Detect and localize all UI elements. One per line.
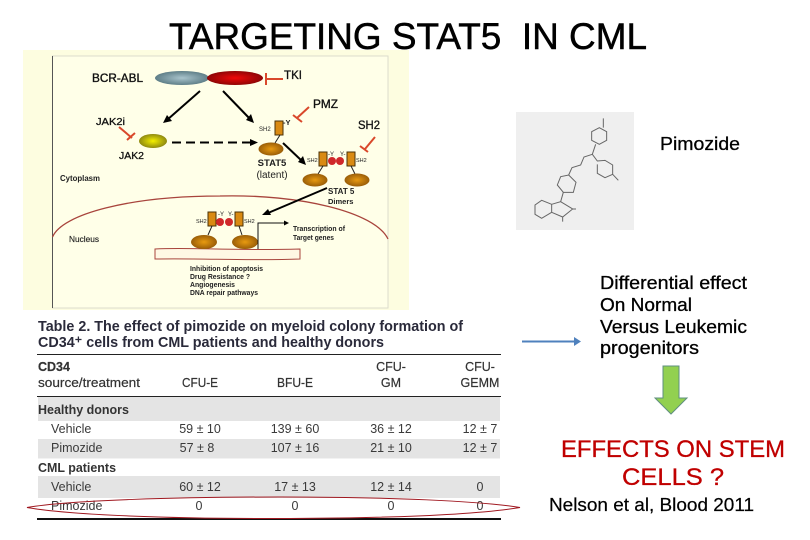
table body: 36 ± 12 xyxy=(370,422,412,436)
SH2 inhibitor: SH2 xyxy=(358,118,380,132)
latent STAT5: (latent) xyxy=(256,170,288,181)
table body: 139 ± 60 xyxy=(271,422,319,436)
table body: 12 ± 7 xyxy=(463,441,497,455)
table body: 0 xyxy=(292,499,299,513)
arrow: green down xyxy=(655,366,687,414)
downstream effects list: Angiogenesis xyxy=(190,280,235,289)
table header: GM xyxy=(381,376,401,390)
table rows shading xyxy=(38,397,500,498)
STAT5 dimer on DNA: SH2 xyxy=(196,219,207,225)
table body: Healthy donors xyxy=(38,403,129,417)
table body: CML patients xyxy=(38,461,116,475)
PMZ inhibitor xyxy=(293,97,338,122)
nucleus label: Nucleus xyxy=(69,235,99,244)
JAK2 xyxy=(119,134,167,162)
table body: 12 ± 14 xyxy=(370,480,412,494)
JAK2 inhibitor xyxy=(96,116,135,140)
table body: 0 xyxy=(196,499,203,513)
STAT5 dimer on DNA: -Y xyxy=(218,212,224,218)
table body: 17 ± 13 xyxy=(274,480,316,494)
table body: 0 xyxy=(388,499,395,513)
STAT5 dimer in cytoplasm: SH2 xyxy=(307,158,318,164)
STAT5 dimer on DNA: Y- xyxy=(228,212,233,218)
STAT5 dimer in cytoplasm xyxy=(302,152,370,186)
latent STAT5: STAT5 xyxy=(258,158,287,169)
table header: CFU-E xyxy=(182,376,218,390)
table title: Table 2. The effect of pimozide on myeloid colony formation of xyxy=(38,318,464,335)
nuclear membrane xyxy=(52,196,388,239)
table body: 107 ± 16 xyxy=(271,441,319,455)
title: TARGETING STAT5 IN CML xyxy=(169,16,647,57)
downstream effects list: DNA repair pathways xyxy=(190,288,258,297)
citation: Nelson et al, Blood 2011 xyxy=(549,495,754,515)
table header: GEMM xyxy=(461,376,499,390)
table header: CD34 xyxy=(38,360,70,374)
arrow to dimers xyxy=(283,143,306,165)
table header: CFU- xyxy=(376,360,406,374)
arrow: table to text xyxy=(522,337,581,346)
table body: 60 ± 12 xyxy=(179,480,221,494)
table body: Vehicle xyxy=(51,480,91,494)
latent STAT5 xyxy=(256,118,290,181)
table body: 0 xyxy=(477,499,484,513)
table body: 12 ± 7 xyxy=(463,422,497,436)
table body: Pimozide xyxy=(51,441,102,455)
table title: CD34⁺ cells from CML patients and healthy donors xyxy=(38,334,384,351)
table body: 59 ± 10 xyxy=(179,422,221,436)
STAT5 dimer in cytoplasm: SH2 xyxy=(356,158,367,164)
downstream effects list: Drug Resistance ? xyxy=(190,272,250,281)
downstream effects list: Inhibition of apoptosis xyxy=(190,264,263,273)
molecule xyxy=(535,118,618,222)
STAT5 dimer in cytoplasm: Y- xyxy=(340,152,345,158)
STAT 5 dimers label: STAT 5 xyxy=(328,187,355,196)
text: differential effect: On Normal xyxy=(600,294,692,315)
cytoplasm label: Cytoplasm xyxy=(60,174,100,183)
TKI inhibitor xyxy=(266,70,302,85)
table body: 57 ± 8 xyxy=(180,441,214,455)
callout: effects on stem cells: EFFECTS ON STEM xyxy=(561,436,785,463)
arrow dimers into nucleus xyxy=(262,188,327,215)
panel: table of pimozide effects xyxy=(27,318,520,519)
panel: STAT5 signalling pathway diagram: Dimers xyxy=(328,197,353,206)
DNA strand xyxy=(155,248,300,260)
table header: CFU- xyxy=(465,360,495,374)
text: differential effect: Differential effect xyxy=(600,272,747,293)
TKI inhibitor: TKI xyxy=(284,70,302,82)
STAT5 dimer on DNA: SH2 xyxy=(244,219,255,225)
transcription label: Transcription of xyxy=(293,224,345,233)
table header: source/treatment xyxy=(38,376,141,390)
table header: BFU-E xyxy=(277,376,313,390)
dashed arrow JAK2 to STAT5 xyxy=(172,139,258,146)
BCR-ABL label: BCR-ABL xyxy=(92,73,144,85)
PMZ inhibitor: PMZ xyxy=(313,97,338,111)
callout: effects on stem cells: CELLS ? xyxy=(622,464,724,491)
STAT5 dimer in cytoplasm: -Y xyxy=(328,152,334,158)
STAT5 dimer on DNA xyxy=(191,212,258,249)
transcription label: Target genes xyxy=(293,233,334,242)
JAK2: JAK2 xyxy=(119,150,144,162)
panel: STAT5 signalling pathway diagram xyxy=(23,50,409,310)
table body: Pimozide xyxy=(51,499,102,513)
table body: 21 ± 10 xyxy=(370,441,412,455)
Pimozide label: Pimozide xyxy=(660,133,740,154)
SH2 inhibitor xyxy=(358,118,380,152)
red ellipse highlight xyxy=(27,497,520,519)
table header xyxy=(38,360,499,390)
table body xyxy=(38,403,497,513)
table body: Vehicle xyxy=(51,422,91,436)
text: differential effect: Versus Leukemic xyxy=(600,316,747,337)
table body: 0 xyxy=(477,480,484,494)
activation arrows from BCR-ABL xyxy=(163,91,254,123)
latent STAT5: -Y xyxy=(283,118,290,127)
latent STAT5: SH2 xyxy=(259,127,271,133)
panel: pimozide structure xyxy=(516,112,634,230)
transcription arrow xyxy=(258,220,289,249)
BCR-ABL fusion protein xyxy=(155,71,263,85)
JAK2 inhibitor: JAK2i xyxy=(96,116,125,128)
text: differential effect: progenitors xyxy=(600,337,699,358)
